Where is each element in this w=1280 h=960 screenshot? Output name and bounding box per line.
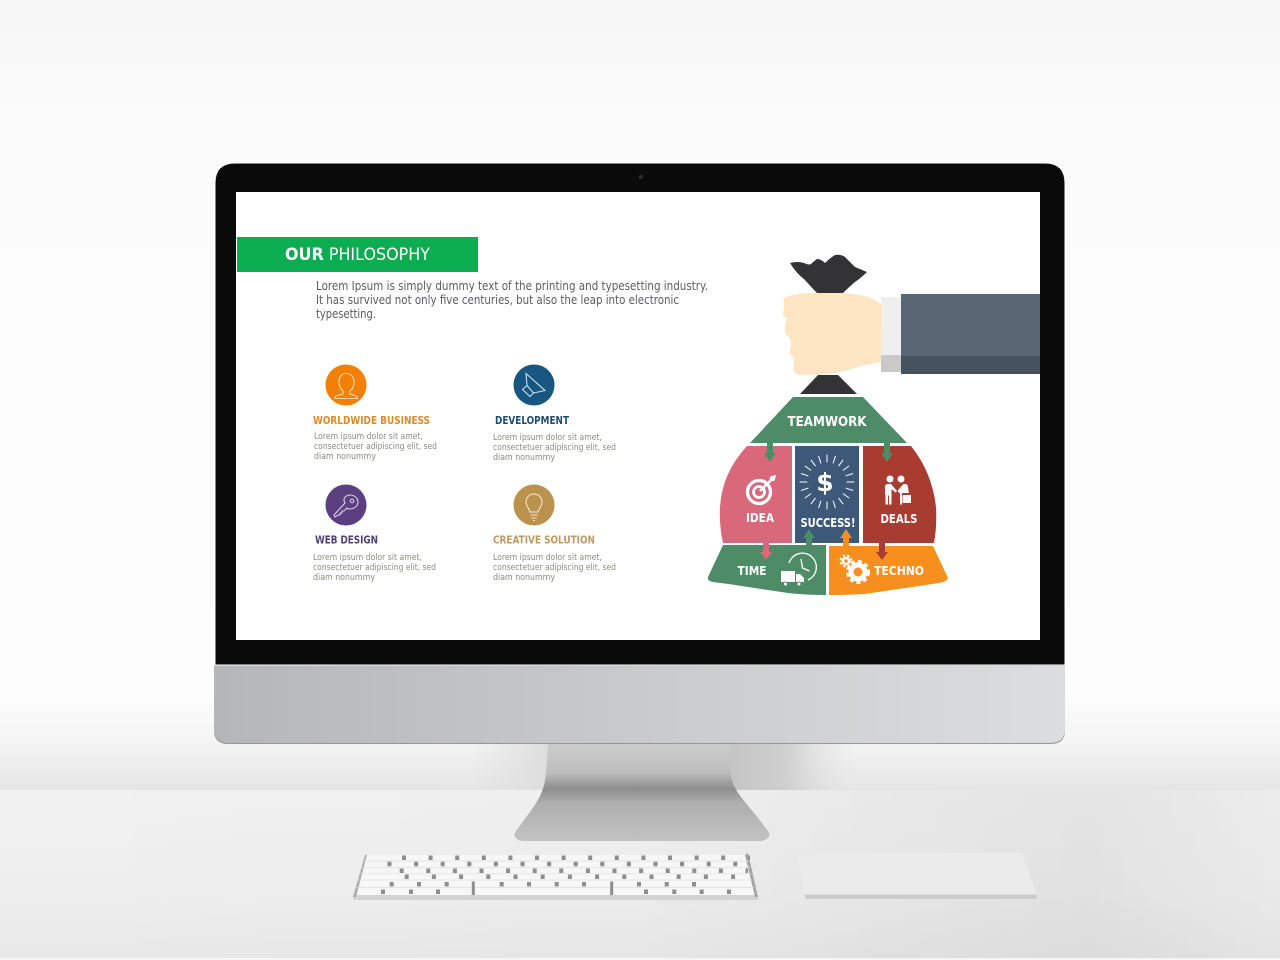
intro paragraph: typesetting. <box>316 306 376 321</box>
segment: idea: IDEA <box>746 510 774 525</box>
item: creative solution: Lorem ipsum dolor sit amet, <box>493 553 602 563</box>
item: worldwide business: Lorem ipsum dolor sit amet, <box>314 432 423 442</box>
segment: success <box>795 446 859 543</box>
item: worldwide business <box>313 364 437 462</box>
segment: time: TIME <box>738 563 766 578</box>
arrow: idea to time <box>760 543 772 560</box>
intro paragraph: Lorem Ipsum is simply dummy text of the printing and typesetting industry. <box>316 278 708 293</box>
item: development: diam nonummy <box>493 453 555 463</box>
monitor stand <box>514 744 770 845</box>
item: web design: Lorem ipsum dolor sit amet, <box>313 553 422 563</box>
item: development: DEVELOPMENT <box>495 415 570 427</box>
item: creative solution <box>493 484 616 583</box>
segment: teamwork: TEAMWORK <box>788 415 867 430</box>
item: web design: WEB DESIGN <box>315 534 378 546</box>
item: worldwide business: diam nonummy <box>314 452 376 462</box>
icon: target <box>748 476 775 504</box>
item: web design: diam nonummy <box>313 573 375 583</box>
icon: handshake <box>885 476 911 504</box>
keyboard <box>353 853 758 900</box>
desk surface <box>0 790 1280 960</box>
intro paragraph <box>316 278 708 321</box>
arrow: teamwork to idea <box>764 443 776 462</box>
segment: techno: TECHNO <box>874 563 924 578</box>
icon: person <box>326 364 366 406</box>
icon: light bulb <box>514 484 554 526</box>
sleeve <box>901 294 1040 374</box>
segment: idea <box>720 446 792 543</box>
segment: success: SUCCESS! <box>800 516 856 530</box>
item: worldwide business: consectetuer adipiscing elit, sed <box>314 442 437 452</box>
item: creative solution: CREATIVE SOLUTION <box>493 534 595 546</box>
item: creative solution: diam nonummy <box>493 573 555 583</box>
item: web design: consectetuer adipiscing elit, sed <box>313 563 436 573</box>
segment: time <box>708 545 826 595</box>
item: development: consectetuer adipiscing elit, sed <box>493 443 616 453</box>
arrow: techno to success <box>840 529 852 546</box>
segment: deals <box>863 446 936 543</box>
item: development <box>493 364 616 463</box>
slide screen <box>236 192 1040 640</box>
icon: megaphone <box>514 364 554 406</box>
fist <box>783 293 882 375</box>
hand holding bag illustration <box>708 255 1040 595</box>
stand shadow on wall <box>470 744 858 790</box>
bag knot top <box>790 255 867 293</box>
item: web design <box>313 484 436 583</box>
icon: gears <box>840 556 868 582</box>
title banner: OUR PHILOSOPHY <box>285 245 431 265</box>
arrow: deals to techno <box>876 543 888 560</box>
bag neck <box>800 375 857 394</box>
icon: key <box>326 484 366 526</box>
segment: teamwork <box>750 397 907 443</box>
item: worldwide business: WORLDWIDE BUSINESS <box>313 415 430 427</box>
segment: deals: DEALS <box>880 511 918 526</box>
item: development: Lorem ipsum dolor sit amet, <box>493 433 602 443</box>
arrow: teamwork to deals <box>881 443 893 462</box>
shirt cuff <box>881 297 901 372</box>
segment: techno <box>829 546 948 595</box>
title banner <box>237 237 478 272</box>
icon: dollar burst: $ <box>816 468 834 497</box>
trackpad <box>797 853 1037 899</box>
intro paragraph: It has survived not only five centuries, but also the leap into electronic <box>316 292 679 307</box>
monitor body <box>214 163 1065 744</box>
icon: clock and truck <box>781 553 816 586</box>
item: creative solution: consectetuer adipiscing elit, sed <box>493 563 616 573</box>
arrow: time to success <box>803 529 815 546</box>
